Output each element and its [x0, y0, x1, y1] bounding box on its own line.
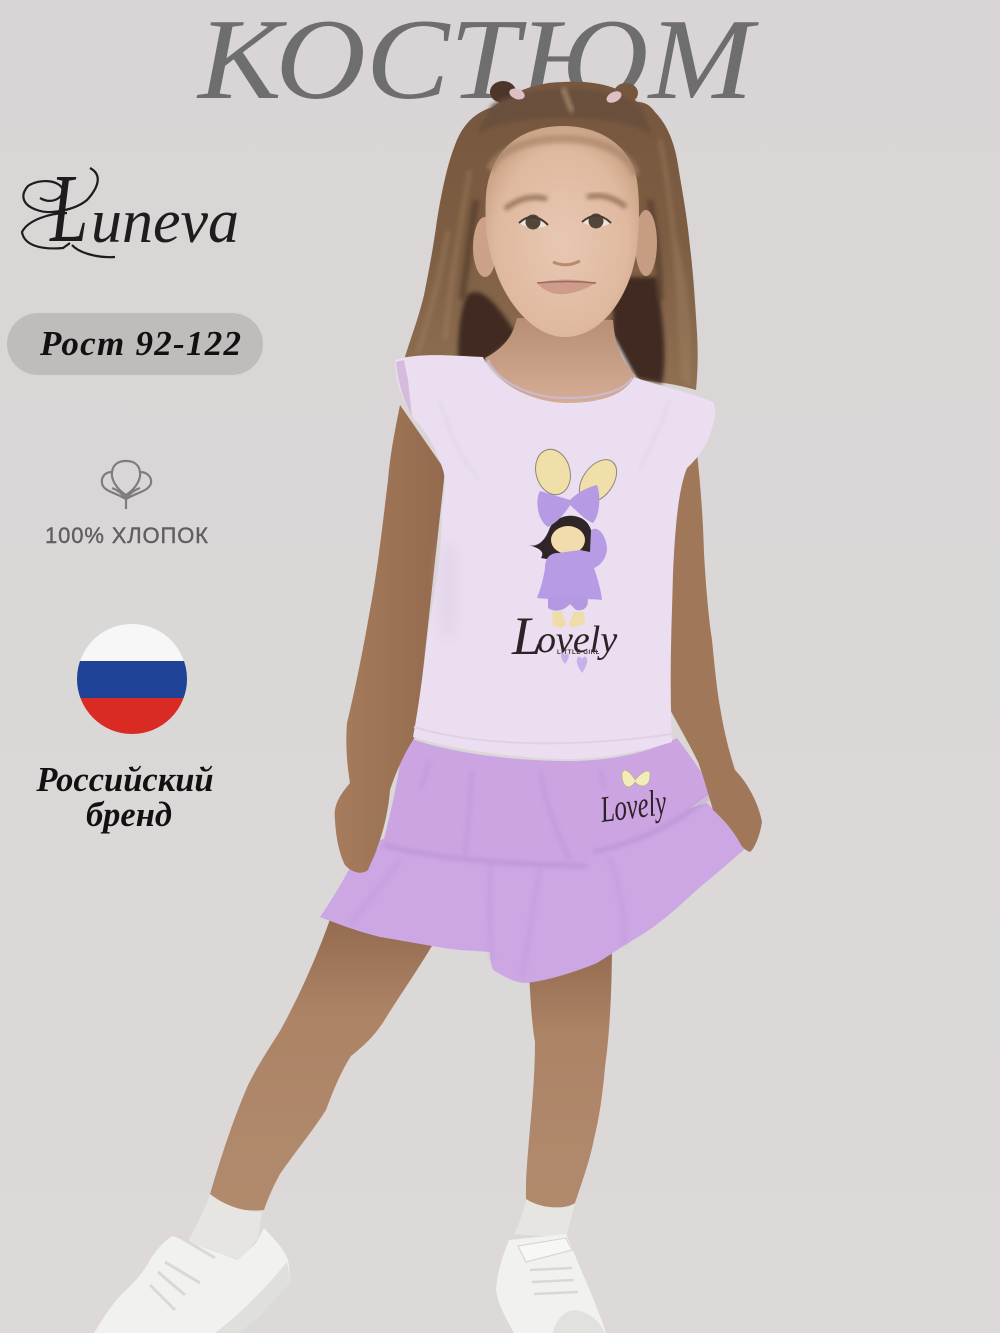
logo: L [49, 155, 88, 263]
size pill [7, 313, 263, 375]
hairline shading [490, 139, 636, 175]
ears [473, 210, 657, 277]
graphic: girl with bunny bow: LITTLE GIRL [557, 650, 600, 656]
left sock [187, 1194, 262, 1260]
top shading [396, 360, 672, 743]
upper skirt layer [383, 738, 714, 863]
right arm [665, 440, 762, 852]
cotton badge [45, 461, 208, 548]
graphic lettering: L [511, 606, 542, 666]
size pill: Рост 92-122 [39, 324, 241, 363]
lower skirt layer [320, 803, 747, 983]
eyes, brows, nose and mouth [505, 196, 626, 294]
upper ruffle folds [420, 760, 605, 860]
logo [22, 155, 239, 263]
skirt print: Lovely [597, 782, 669, 831]
skirt folds [350, 858, 625, 978]
graphic: girl with bunny bow [511, 445, 624, 673]
face [485, 126, 639, 337]
russian brand label: бренд [86, 796, 172, 834]
russian brand label [35, 761, 214, 834]
top [395, 355, 715, 759]
icon: cotton boll [102, 461, 151, 509]
right sock [514, 1199, 575, 1238]
left leg [210, 905, 450, 1210]
right shoe [496, 1234, 606, 1333]
logo: uneva [91, 188, 239, 256]
graphic lettering: ovely [537, 619, 617, 661]
right leg [526, 935, 612, 1209]
left arm [335, 405, 445, 873]
icon: russian flag circle [77, 624, 187, 734]
ruffle hem shadow [383, 794, 712, 866]
cotton label: 100% ХЛОПОК [45, 523, 208, 548]
skirt print [597, 770, 669, 831]
russian brand label: Российский [35, 761, 214, 799]
hair [405, 81, 698, 390]
left shoe [94, 1228, 291, 1333]
photo: girl in lilac outfit [94, 81, 762, 1333]
neck [485, 318, 636, 405]
